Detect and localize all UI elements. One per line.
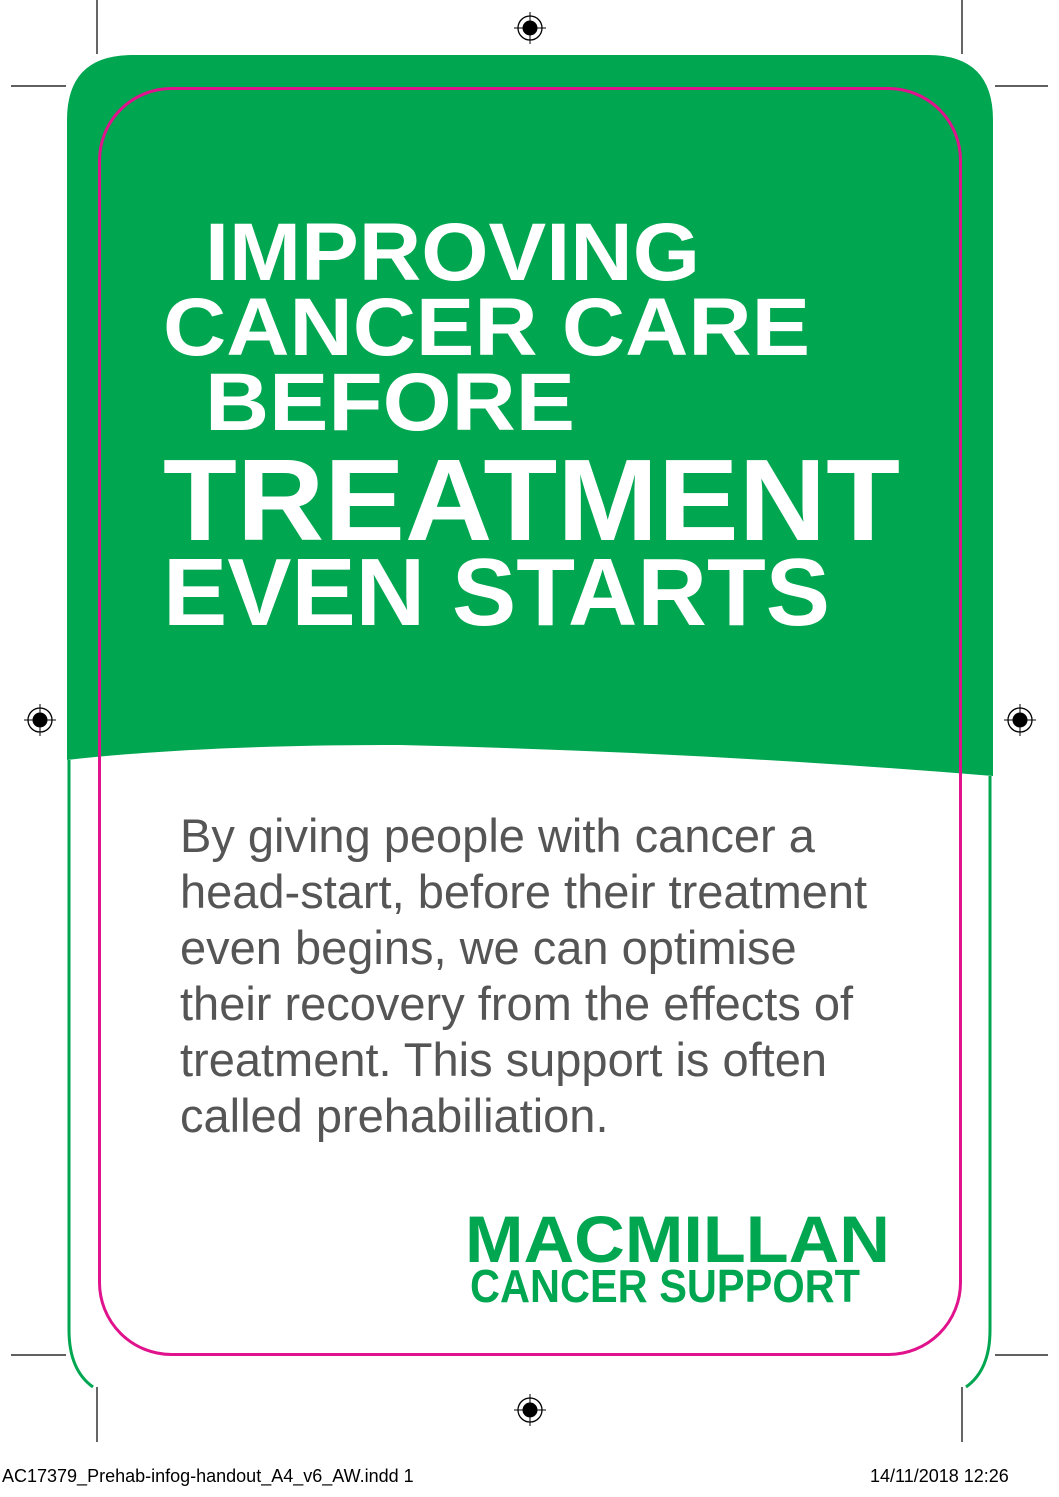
footer slug xyxy=(2,1466,1009,1487)
green side outlines xyxy=(69,760,93,1387)
body text xyxy=(180,809,867,1142)
body text: treatment. This support is often xyxy=(180,1033,827,1086)
body text: called prehabiliation. xyxy=(180,1089,609,1142)
title: TREATMENT xyxy=(163,435,900,565)
footer slug: AC17379_Prehab-infog-handout_A4_v6_AW.indd 1 xyxy=(2,1466,414,1487)
body text: By giving people with cancer a xyxy=(180,809,816,862)
title: BEFORE xyxy=(205,357,575,448)
body text: even begins, we can optimise xyxy=(180,921,797,974)
body text: head-start, before their treatment xyxy=(180,865,867,918)
body text: their recovery from the effects of xyxy=(180,977,854,1030)
green header panel xyxy=(67,55,993,776)
logo: CANCER SUPPORT xyxy=(470,1260,860,1312)
footer slug: 14/11/2018 12:26 xyxy=(870,1466,1009,1486)
logo: MACMILLAN xyxy=(465,1202,890,1276)
logo xyxy=(465,1202,890,1312)
title xyxy=(163,207,900,646)
title: IMPROVING xyxy=(205,207,700,298)
title: CANCER CARE xyxy=(163,282,810,373)
title: EVEN STARTS xyxy=(163,539,830,646)
magenta border xyxy=(100,88,960,1354)
